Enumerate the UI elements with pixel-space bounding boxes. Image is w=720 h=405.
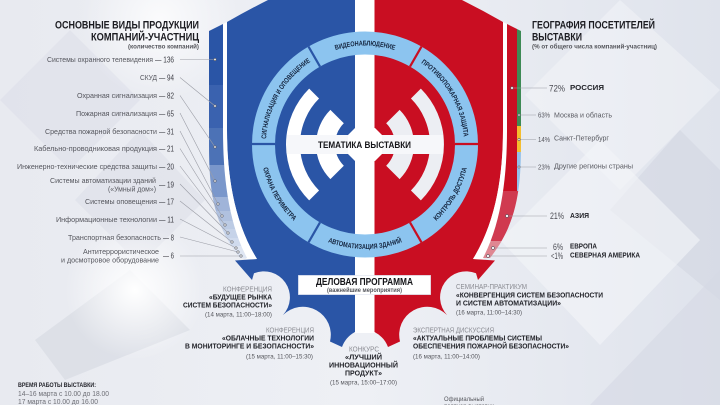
product list: — 82 [159,90,174,100]
product list: Антитеррористическое [83,247,159,256]
shield: red half [374,0,503,347]
ring of exhibition topics: АВТОМАТИЗАЦИЯ ЗДАНИЙ [328,236,402,250]
left heading: ОСНОВНЫЕ ВИДЫ ПРОДУКЦИИ [55,20,199,32]
product list: — 20 [159,162,174,172]
opening hours: ВРЕМЯ РАБОТЫ ВЫСТАВКИ: [18,382,96,389]
left heading [55,20,199,50]
shield: blue half [227,0,355,347]
wifi signal emblem [287,94,443,195]
product list: Инженерно-технические средства защиты [17,162,157,171]
product list: — 31 [159,126,174,136]
ring of exhibition topics: КОНТРОЛЬ ДОСТУПА [433,168,467,221]
product list: — 136 [155,54,174,64]
event: expert discussion [413,326,569,360]
event: conference cloud [185,326,314,360]
geography list: 23% [538,162,550,172]
event: expert discussion: «АКТУАЛЬНЫЕ ПРОБЛЕМЫ СИСТЕМЫ [413,334,542,342]
business programme heading box: ДЕЛОВАЯ ПРОГРАММА [316,277,413,288]
event: conference future [183,284,272,318]
geography list: Другие регионы страны [554,162,633,170]
business programme heading box [298,276,430,294]
event: workshop [456,282,603,316]
product list: — 94 [159,72,174,82]
event: contest: (15 марта, 15:00–17:00) [330,380,397,386]
event: conference cloud: В МОНИТОРИНГЕ И БЕЗОПАСНОСТИ» [185,342,314,350]
ring of exhibition topics: ПРОТИВОПОЖАРНАЯ ЗАЩИТА [421,59,468,137]
product list: — 6 [163,250,174,260]
event: conference cloud: (15 марта, 11:00–15:30) [246,354,313,360]
event: contest: «ЛУЧШИЙ [345,352,382,362]
right heading: ВЫСТАВКИ [532,32,582,44]
geography list: АЗИЯ [570,211,589,220]
event: contest: ПРОДУКТ» [345,368,382,378]
product list: Транспортная безопасность [68,233,161,242]
ring of exhibition topics [252,32,478,258]
event: conference cloud: «ОБЛАЧНЫЕ ТЕХНОЛОГИИ [222,334,314,342]
geography list: 72% [549,84,565,94]
event: expert discussion: ОБЕСПЕЧЕНИЯ ПОЖАРНОЙ БЕЗОПАСНОСТИ» [413,342,569,350]
event: conference cloud: КОНФЕРЕНЦИЯ [266,326,314,334]
product list: («Умный дом») [108,184,156,194]
geography list: СЕВЕРНАЯ АМЕРИКА [570,250,640,260]
product list: Системы охранного телевидения [47,55,153,64]
geography list: <1% [551,251,563,262]
event: conference future: (14 марта, 11:00–18:00) [205,312,272,318]
geography list [538,83,640,262]
product list: Пожарная сигнализация [76,109,157,118]
shield centre white stripe [354,0,376,333]
official partner note: Официальный [444,395,484,403]
leader dots: products [214,58,242,257]
geography list: Санкт-Петербург [554,134,609,142]
event: workshop: «КОНВЕРГЕНЦИЯ СИСТЕМ БЕЗОПАСНОСТИ [456,290,603,300]
event: expert discussion: (16 марта, 11:00–14:00) [413,354,480,360]
geography list: 63% [538,110,550,120]
event: expert discussion: ЭКСПЕРТНАЯ ДИСКУССИЯ [413,326,494,334]
event: conference future: СИСТЕМ БЕЗОПАСНОСТИ» [183,300,272,310]
event: workshop: И СИСТЕМ АВТОМАТИЗАЦИИ» [456,298,561,308]
geography list: 21% [550,211,564,222]
geography list: Москва и область [554,110,612,120]
product list: Системы автоматизации зданий [50,176,156,185]
right heading: ГЕОГРАФИЯ ПОСЕТИТЕЛЕЙ [532,18,655,32]
product list: Охранная сигнализация [77,91,157,100]
ring of exhibition topics: ОХРАНА ПЕРИМЕТРА [264,168,296,221]
ring of exhibition topics: ВИДЕОНАБЛЮДЕНИЕ [334,40,396,50]
product list: СКУД [140,73,157,82]
official partner note [444,395,494,405]
left heading: (количество компаний) [128,42,199,50]
right heading [532,18,657,50]
opening hours [18,382,109,405]
geography list: РОССИЯ [570,83,604,92]
product list: и досмотровое оборудование [61,256,159,264]
geography list: ЕВРОПА [570,242,597,250]
opening hours: 14–16 марта с 10.00 до 18.00 [18,389,109,398]
white gaps beside shield [223,22,507,260]
product list: — 21 [159,144,174,154]
right strip: geography bar [483,24,521,258]
geography list: 6% [553,242,563,253]
centre heading: ТЕМАТИКА ВЫСТАВКИ [318,140,411,151]
product list: Информационные технологии [56,215,157,224]
product list: — 65 [159,108,174,118]
event: contest: КОНКУРС [349,344,379,354]
product list: Системы оповещения [85,197,157,206]
product list: — 8 [163,232,174,242]
product list: Средства пожарной безопасности [45,127,157,136]
geography list: 14% [538,135,550,144]
event: workshop: (16 марта, 11:00–14:30) [456,310,522,316]
product list: — 11 [159,214,174,224]
business programme heading box: (важнейшие мероприятия) [327,286,402,294]
event: contest: ИННОВАЦИОННЫЙ [329,360,398,370]
product list: — 17 [159,196,174,206]
product list: — 19 [159,180,174,190]
product list [17,54,174,264]
leader lines: products [180,60,241,256]
left strip: segmented product bar [209,24,247,258]
ring of exhibition topics: СИГНАЛИЗАЦИЯ И ОПОВЕЩЕНИЕ [261,58,310,138]
event: conference future: «БУДУЩЕЕ РЫНКА [209,292,272,302]
event: contest [329,344,398,386]
left heading: КОМПАНИЙ-УЧАСТНИЦ [91,30,199,44]
event: conference future: КОНФЕРЕНЦИЯ [223,284,272,294]
product list: Кабельно-проводниковая продукция [34,144,157,153]
leader lines: geography [488,88,547,256]
event: workshop: СЕМИНАР-ПРАКТИКУМ [456,282,527,291]
right heading: (% от общего числа компаний-участниц) [532,42,657,50]
leader dots: geography [487,87,520,257]
